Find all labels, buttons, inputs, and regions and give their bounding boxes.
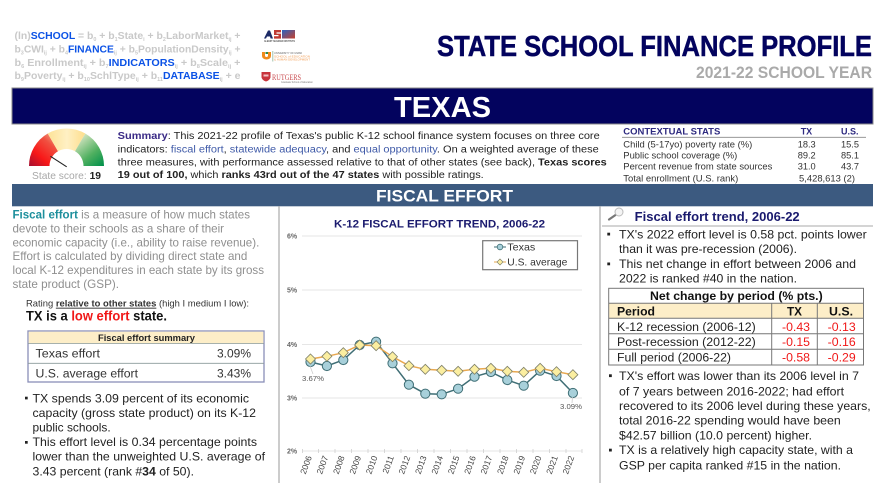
- x-axis year labels: 2020: [528, 454, 544, 475]
- net change by period table: [609, 288, 864, 365]
- net change by period table: -0.15: [782, 337, 810, 349]
- rating statement: [26, 299, 249, 324]
- line chart: fiscal effort trend: [287, 218, 582, 475]
- net change by period table: Net change by period (% pts.): [650, 291, 823, 303]
- data labels: [302, 366, 582, 411]
- contextual stats table: 18.3: [798, 139, 816, 150]
- x-axis year labels: 2019: [511, 454, 527, 475]
- data labels: 3.67%: [302, 374, 324, 383]
- right bullets bottom: recovered to its 2006 level during these years,: [619, 399, 871, 413]
- x-axis year labels: 2012: [396, 454, 412, 475]
- section header: fiscal effort: [12, 184, 873, 206]
- logo: University of Miami: SCHOOL of EDUCATION: [274, 54, 310, 58]
- right column heading: Fiscal effort trend, 2006-22: [635, 210, 800, 224]
- series: U.S. average: [306, 340, 578, 380]
- rating statement: Rating relative to other states (high I medium I low):: [26, 299, 249, 310]
- fiscal effort summary table: [28, 331, 264, 382]
- logo: Albert Shanker Institute: [264, 30, 295, 43]
- logo: Rutgers: [262, 72, 313, 84]
- x-axis year labels: 2009: [347, 454, 363, 475]
- logo: University of Miami: & HUMAN DEVELOPMENT: [274, 58, 310, 62]
- left bullets: This effort level is 0.34 percentage points: [32, 435, 257, 449]
- left bullets: lower than the unweighted U.S. average of: [32, 450, 266, 464]
- x-axis year labels: 2021: [544, 454, 560, 475]
- definition text: Fiscal effort is a measure of how much states: [12, 207, 250, 221]
- contextual stats table: TX: [801, 127, 812, 137]
- x-axis year labels: 2016: [462, 454, 478, 475]
- contextual stats table: 43.7: [841, 162, 859, 173]
- net change by period table: Full period (2006-22): [617, 353, 731, 365]
- state banner: [12, 88, 873, 124]
- summary text: three measures, with performance assessed relative to that of other states (see back), Texas scores: [118, 158, 607, 169]
- line chart: fiscal effort trend: 5%: [287, 288, 298, 294]
- right bullets bottom: of 7 years between 2016-2022; had effort: [619, 384, 845, 398]
- section header: fiscal effort: FISCAL EFFORT: [376, 187, 514, 206]
- x-axis year labels: [298, 454, 576, 475]
- state banner: TEXAS: [394, 92, 491, 124]
- definition text: state product (GSP).: [12, 277, 119, 291]
- formula graphic: b9Povertyij + b10SchlTypeij + b11DATABASEij + e: [14, 70, 241, 82]
- definition text: devote to their schools as a share of their: [12, 221, 224, 235]
- fiscal effort summary table: U.S. average effort: [36, 368, 139, 380]
- definition text: economic capacity (i.e., ability to raise revenue).: [12, 235, 259, 249]
- net change by period table: U.S.: [829, 306, 853, 318]
- x-axis year labels: 2010: [364, 454, 380, 475]
- x-axis year labels: 2007: [314, 454, 330, 475]
- definition text: [12, 207, 264, 291]
- left bullets: 3.43 percent (rank #34 of 50).: [32, 465, 194, 479]
- x-axis year labels: 2014: [429, 454, 445, 475]
- right bullets bottom: [609, 369, 871, 472]
- contextual stats table: Total enrollment (U.S. rank): [623, 173, 738, 184]
- contextual stats table: 15.5: [841, 139, 859, 150]
- definition text: Effort is calculated by dividing direct state and: [12, 249, 247, 263]
- legend: U.S. average: [507, 257, 567, 269]
- summary text: Summary : This 2021-22 profile of Texas's public K-12 school finance system focuses on three core: [118, 131, 600, 142]
- net change by period table: -0.13: [828, 322, 856, 334]
- right bullets top: than it was pre-recession (2006).: [619, 242, 797, 256]
- gauge: state score: State score: 19: [32, 170, 101, 182]
- summary text: 19 out of 100, which ranks 43rd out of the 47 states with possible ratings.: [118, 170, 484, 181]
- x-axis year labels: 2022: [560, 454, 576, 475]
- fiscal effort summary table: Fiscal effort summary: [98, 333, 195, 343]
- formula graphic: [14, 30, 241, 82]
- contextual stats table: Public school coverage (%): [623, 151, 737, 162]
- formula graphic: b3CWIij + b4FINANCEij + b5PopulationDensityij +: [14, 44, 240, 56]
- net change by period table: -0.16: [828, 337, 856, 349]
- contextual stats table: 89.2: [798, 151, 816, 162]
- logo: University of Miami: [262, 51, 310, 62]
- contextual stats table: 31.0: [798, 162, 816, 173]
- net change by period table: -0.29: [828, 353, 856, 365]
- x-axis year labels: 2018: [495, 454, 511, 475]
- left bullets: TX spends 3.09 percent of its economic: [32, 391, 249, 405]
- gauge: state score: [29, 128, 104, 182]
- chart title: K-12 FISCAL EFFORT TREND, 2006-22: [334, 218, 545, 230]
- contextual stats table: 85.1: [841, 151, 859, 162]
- legend: [483, 241, 578, 270]
- right bullets bottom: total 2016-22 spending would have been: [619, 414, 841, 428]
- logo: Albert Shanker Institute: ALBERT SHANKER INSTITUTE: [264, 39, 295, 43]
- x-axis year labels: 2008: [331, 454, 347, 475]
- logo: Rutgers: RUTGERS: [272, 73, 301, 82]
- data labels: 3.09%: [560, 402, 582, 411]
- x-axis year labels: 2013: [413, 454, 429, 475]
- fiscal effort summary table: 3.09%: [217, 349, 251, 361]
- net change by period table: Post-recession (2012-22): [617, 337, 756, 349]
- fiscal effort summary table: Texas effort: [36, 349, 101, 361]
- legend: Texas: [507, 242, 535, 254]
- formula graphic: (ln)SCHOOL = b0 + b1Statei + b2LaborMarketij +: [14, 30, 240, 42]
- formula graphic: b6 Enrollment ij + b7INDICATORS ij + b8Scaleij +: [14, 57, 241, 70]
- x-axis year labels: 2017: [478, 454, 494, 475]
- series: Texas: [306, 337, 578, 399]
- right bullets bottom: TX is a relatively high capacity state, with a: [619, 443, 853, 457]
- net change by period table: K-12 recession (2006-12): [617, 322, 756, 334]
- line chart: fiscal effort trend: 2%: [287, 448, 298, 456]
- line chart: fiscal effort trend: 3%: [287, 396, 298, 402]
- net change by period table: Period: [617, 306, 655, 318]
- logo: University of Miami: UNIVERSITY OF MIAMI: [274, 51, 302, 55]
- right bullets bottom: $42.57 billion (10.0 percent) higher.: [619, 428, 812, 442]
- fiscal effort summary table: 3.43%: [217, 368, 251, 380]
- contextual stats table: Percent revenue from state sources: [623, 162, 773, 173]
- right bullets top: [607, 227, 867, 286]
- left bullets: public schools.: [32, 420, 111, 434]
- net change by period table: TX: [787, 306, 802, 318]
- contextual stats table: Child (5-17yo) poverty rate (%): [623, 139, 752, 150]
- right bullets top: 2022 is ranked #40 in the nation.: [619, 272, 797, 286]
- line chart: fiscal effort trend: 6%: [287, 234, 298, 240]
- logo: Rutgers: Graduate School of Education: [281, 80, 313, 84]
- contextual stats table: [622, 127, 866, 184]
- right bullets top: This net change in effort between 2006 and: [619, 257, 856, 271]
- left bullets: [25, 391, 266, 479]
- contextual stats table: U.S.: [841, 127, 859, 137]
- net change by period table: -0.43: [782, 322, 810, 334]
- contextual stats table: CONTEXTUAL STATS: [623, 127, 720, 137]
- x-axis year labels: 2015: [446, 454, 462, 475]
- right bullets bottom: TX's effort was lower than its 2006 level in 7: [619, 369, 859, 383]
- right bullets top: TX's 2022 effort level is 0.58 pct. points lower: [619, 227, 867, 241]
- left bullets: capacity (gross state product) on its K-12: [32, 406, 256, 420]
- rating statement: TX is a low effort state.: [26, 309, 167, 324]
- definition text: local K-12 expenditures in each state by its gross: [12, 263, 264, 277]
- net change by period table: -0.58: [782, 353, 810, 365]
- right bullets bottom: GSP per capita ranked #15 in the nation.: [619, 458, 841, 472]
- summary text: [118, 131, 607, 181]
- icon: magnifying glass: [609, 208, 623, 220]
- x-axis year labels: 2006: [298, 454, 314, 475]
- summary text: indicators: fiscal effort , statewide adequacy , and equal opportunity . On a weighted average of these: [118, 144, 599, 155]
- line chart: fiscal effort trend: 4%: [287, 342, 298, 349]
- contextual stats table: 5,428,613 (2): [799, 173, 855, 184]
- x-axis year labels: 2011: [380, 454, 396, 475]
- subtitle: school year: 2021-22 SCHOOL YEAR: [696, 64, 872, 82]
